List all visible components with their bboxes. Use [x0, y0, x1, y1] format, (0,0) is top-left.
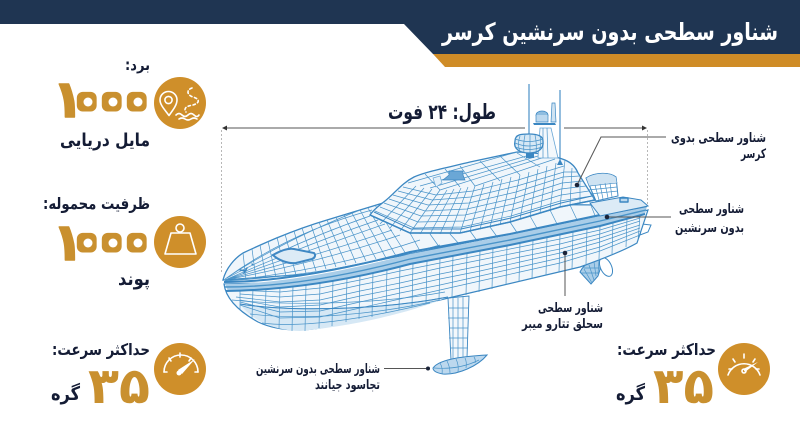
hatch [273, 249, 315, 263]
icon: speedometer left [154, 343, 206, 395]
payload value [52, 213, 150, 273]
callout: foil: شناور سطحی بدون سرنشین [256, 362, 380, 377]
callout: hull: شناور سطحی [538, 301, 603, 316]
boat wireframe [223, 84, 651, 374]
icon: weight [154, 216, 206, 268]
callout: vessel: بدون سرنشین [675, 221, 744, 236]
stat: payload: ظرفیت محموله: [43, 194, 150, 213]
stat: payload: پوند [118, 269, 150, 290]
stat: range: برد: [125, 56, 150, 74]
bow fitting [240, 264, 253, 273]
rear housing [586, 173, 618, 201]
payload value: ۰۰۰ [73, 214, 150, 267]
stat: top speed right [616, 340, 716, 415]
callout: hull [521, 251, 603, 332]
callout: cabin: شناور سطحی بدوی [671, 131, 766, 146]
cabin top equipment [433, 84, 563, 187]
range value: ۱ [52, 70, 84, 130]
stat: top speed right: گره [616, 382, 646, 405]
callout: foil: تجاسود جیانند [315, 378, 380, 393]
speed value right: ۳۵ [653, 357, 714, 415]
stat: top speed right: حداکثر سرعت: [617, 340, 716, 359]
callout: cabin [575, 131, 766, 187]
icon: speedometer right [718, 343, 770, 395]
payload value: ۱ [52, 213, 84, 273]
stat: payload [43, 194, 150, 290]
stat: top speed left: گره [51, 382, 81, 405]
callout: vessel: شناور سطحی [679, 202, 744, 217]
length dimension [222, 100, 648, 272]
callout: hull: سحلق تتارو میبر [521, 317, 603, 332]
range value [52, 70, 150, 130]
length dimension: طول: ۲۴ فوت [388, 100, 496, 124]
hull side [224, 210, 648, 331]
stat: top speed left [51, 340, 150, 415]
header banner [0, 0, 800, 67]
range value: ۰۰۰ [73, 73, 150, 126]
stat: range [52, 56, 150, 151]
callout: foil [256, 362, 430, 393]
callout: cabin: کرسر [740, 147, 766, 162]
foredeck [223, 203, 600, 281]
foil strut and torpedo [433, 296, 487, 374]
stat: top speed left: حداکثر سرعت: [52, 340, 150, 359]
callout: vessel [605, 202, 744, 236]
radar dome [515, 134, 543, 158]
deck gunwale and rail band [224, 197, 648, 291]
speed value left: ۳۵ [88, 357, 150, 415]
stat: range: مایل دریایی [60, 130, 150, 151]
cabin [370, 152, 595, 234]
icon: map pin and route [154, 77, 206, 129]
propeller [580, 252, 615, 284]
stern bracket [640, 224, 651, 235]
